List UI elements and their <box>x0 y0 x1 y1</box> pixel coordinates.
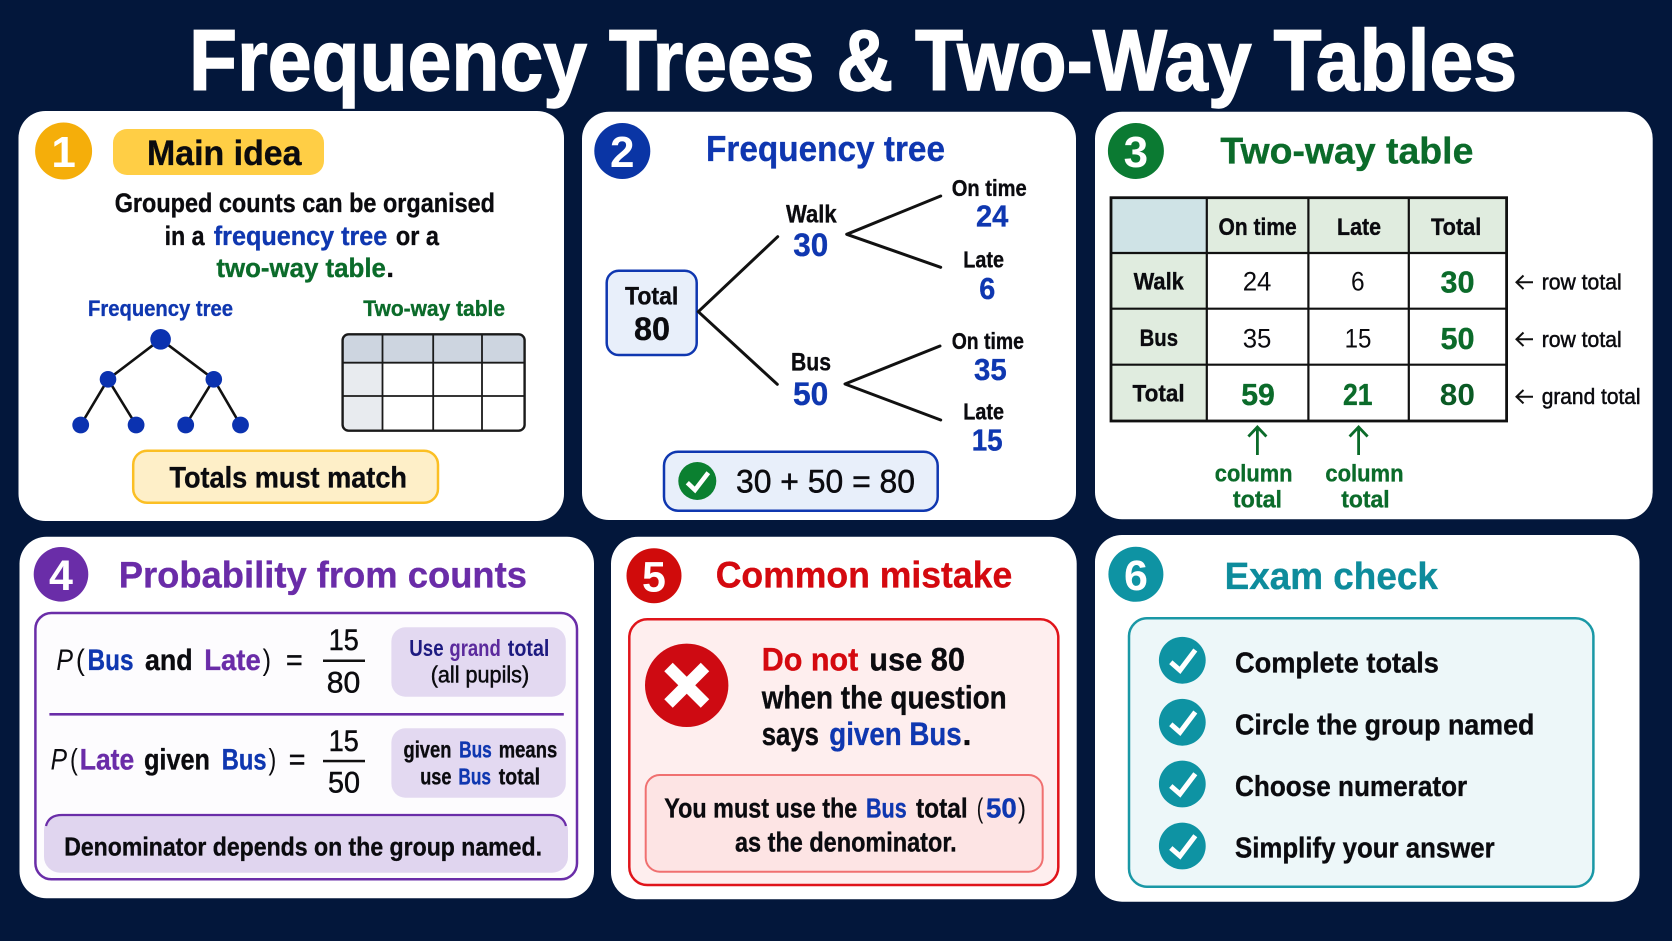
formula: P(Bus and Late) <box>56 624 365 700</box>
heading: two-way table: Two-way table <box>1220 130 1473 171</box>
warning text <box>761 642 1007 752</box>
badge 5 <box>626 548 682 603</box>
badge 4 <box>34 547 88 602</box>
check item: choose numerator <box>1159 761 1467 807</box>
node: bus 50: 50 <box>793 376 828 412</box>
arrow and note: column total 21: total <box>1341 486 1390 513</box>
inner box <box>35 613 577 879</box>
node: bus on time 35: On time <box>952 328 1024 354</box>
node: walk 30 <box>786 200 837 263</box>
formula: P(Bus and Late): and <box>145 644 193 677</box>
heading: exam check: Exam check <box>1225 556 1439 598</box>
note: row total: row total <box>1542 327 1622 352</box>
heading: main idea <box>113 129 324 175</box>
table: 24 <box>1243 267 1271 297</box>
correction box: ( <box>977 792 983 823</box>
heading: probability from counts: Probability from counts <box>119 554 527 595</box>
arrow and note: column total 21: column <box>1325 461 1404 488</box>
correction box <box>646 775 1043 872</box>
badge 3 <box>1108 123 1164 179</box>
formula: P(Bus and Late): 15 <box>329 624 359 657</box>
panel 3: two-way table <box>1095 112 1653 519</box>
note: given bus: total <box>499 763 540 789</box>
node: walk late 6: Late <box>963 247 1004 273</box>
correction box: ) <box>1018 792 1026 823</box>
icon: red cross <box>645 644 728 727</box>
correction box: Bus <box>866 792 907 823</box>
main idea text: two-way table <box>216 253 386 283</box>
note: given bus: use <box>420 763 451 789</box>
formula: P(Bus and Late): ( <box>76 644 85 677</box>
callout: denominator: Denominator depends on the group named. <box>64 832 542 862</box>
main idea text: . <box>386 253 394 283</box>
note: given bus: given <box>404 737 451 763</box>
panel 4: probability from counts <box>20 537 594 898</box>
callout: denominator <box>44 814 568 873</box>
note: grand total: grand total <box>1542 384 1641 409</box>
node: walk on time 24 <box>952 175 1027 234</box>
badge 1: 1 <box>51 128 76 177</box>
check item: simplify your answer <box>1159 823 1495 869</box>
formula: P(Late given Bus): = <box>289 743 305 776</box>
title: Frequency Trees & Two-Way Tables <box>189 13 1517 109</box>
table: 50 <box>1440 321 1474 356</box>
callout: totals must match <box>133 451 438 503</box>
main idea text <box>115 188 495 283</box>
badge 3: 3 <box>1124 128 1148 177</box>
node: bus 50 <box>791 349 831 412</box>
formula: P(Bus and Late): Late <box>204 644 261 677</box>
node: walk 30: 30 <box>793 227 828 263</box>
node: bus late 15: Late <box>963 398 1004 424</box>
heading: main idea: Main idea <box>147 134 302 173</box>
badge 1 <box>35 122 92 180</box>
formula: P(Bus and Late): Bus <box>88 644 134 677</box>
icon: green check <box>678 462 716 500</box>
heading: frequency tree: Frequency tree <box>706 128 945 169</box>
correction box: 50 <box>986 792 1017 823</box>
table: On time <box>1218 214 1297 241</box>
note: use grand total: grand <box>449 635 501 661</box>
badge 6 <box>1108 547 1163 602</box>
warning text: given Bus <box>829 716 962 752</box>
note: use grand total: total <box>508 635 549 661</box>
note: use grand total: (all pupils) <box>431 662 529 688</box>
node: walk on time 24: On time <box>952 175 1027 201</box>
note: use grand total: Use <box>409 635 444 661</box>
tree root: total 80: 80 <box>634 311 670 347</box>
check item: complete totals <box>1159 637 1439 684</box>
formula: P(Late given Bus): ) <box>268 743 276 776</box>
check item: complete totals: Complete totals <box>1235 647 1439 679</box>
panel 6: exam check <box>1095 535 1640 902</box>
main idea text: or a <box>396 221 439 251</box>
label: frequency tree: Frequency tree <box>88 296 233 321</box>
formula: P(Bus and Late): ) <box>263 644 271 677</box>
table: 21 <box>1343 377 1373 412</box>
table: Bus <box>1140 325 1178 352</box>
formula: P(Bus and Late): 80 <box>327 667 360 700</box>
note: use grand total <box>391 627 566 697</box>
correction box: You must use the <box>664 792 857 823</box>
tree branches <box>698 196 941 420</box>
formula: P(Late given Bus): 50 <box>328 767 360 800</box>
formula: P(Bus and Late): = <box>286 644 303 677</box>
arrow and note: column total 59: total <box>1233 486 1282 513</box>
table: 6 <box>1351 267 1365 297</box>
callout: totals must match: Totals must match <box>169 461 407 494</box>
mini tree diagram <box>72 329 249 433</box>
correction box: total <box>916 792 968 823</box>
note: given bus <box>391 728 566 798</box>
table: Late <box>1337 214 1381 241</box>
arrow and note: column total 59 <box>1215 427 1292 513</box>
table <box>1111 198 1507 421</box>
note: given bus: Bus <box>458 763 491 789</box>
formula: P(Late given Bus): P <box>51 743 67 776</box>
node: bus on time 35: 35 <box>974 352 1007 387</box>
heading: common mistake: Common mistake <box>716 555 1012 596</box>
panel 1: main idea <box>18 111 564 521</box>
panel 5: common mistake <box>611 537 1077 899</box>
check item: simplify your answer: Simplify your answer <box>1235 833 1495 865</box>
formula: P(Bus and Late): P <box>56 644 73 677</box>
arrow and note: column total 21 <box>1325 427 1404 513</box>
warning text: says <box>762 716 819 752</box>
label: two-way table: Two-way table <box>363 296 505 321</box>
table: Total <box>1431 214 1481 241</box>
badge 6: 6 <box>1124 552 1148 600</box>
mini two-way table <box>343 334 525 431</box>
table: 80 <box>1440 377 1475 412</box>
table: 15 <box>1345 323 1371 353</box>
node: bus late 15 <box>963 398 1004 458</box>
formula: P(Late given Bus): 15 <box>329 725 359 758</box>
main idea text: in a <box>165 221 205 251</box>
warning box <box>629 619 1058 885</box>
table: Walk <box>1134 268 1184 295</box>
formula: P(Late given Bus): ( <box>70 743 78 776</box>
check item: circle the group named <box>1159 699 1534 746</box>
table: 59 <box>1241 377 1275 412</box>
warning text: Do not <box>762 642 859 678</box>
note: given bus: means <box>499 737 557 763</box>
arrow and note: column total 59: column <box>1215 461 1292 488</box>
node: bus late 15: 15 <box>972 423 1003 458</box>
main idea text: Grouped counts can be organised <box>115 188 495 218</box>
note: given bus: Bus <box>459 737 492 763</box>
main idea text: frequency tree <box>214 221 387 251</box>
correction box: as the denominator. <box>735 827 957 858</box>
warning text: . <box>962 716 971 752</box>
table: 35 <box>1243 323 1271 353</box>
table: Total <box>1132 381 1185 408</box>
node: bus 50: Bus <box>791 349 831 377</box>
node: walk late 6: 6 <box>979 271 995 306</box>
tree root: total 80 <box>607 271 697 355</box>
formula: P(Late given Bus): Late <box>80 743 134 776</box>
formula: P(Late given Bus): given <box>144 743 210 776</box>
check item: choose numerator: Choose numerator <box>1235 771 1467 803</box>
formula: P(Late given Bus): Bus <box>222 743 266 776</box>
formula: P(Late given Bus) <box>51 725 365 800</box>
badge 5: 5 <box>642 554 666 602</box>
tree root: total 80: Total <box>625 282 678 310</box>
node: bus on time 35 <box>952 328 1024 387</box>
check item: circle the group named: Circle the group named <box>1235 709 1534 741</box>
callout: 30 + 50 = 80: 30 + 50 = 80 <box>736 464 915 500</box>
badge 4: 4 <box>49 552 73 600</box>
table: 30 <box>1440 265 1474 300</box>
checklist box <box>1129 618 1593 887</box>
callout: 30 + 50 = 80 <box>664 452 938 511</box>
node: walk on time 24: 24 <box>976 199 1009 234</box>
warning text: use 80 <box>869 642 965 678</box>
panel 2: frequency tree <box>582 112 1076 520</box>
node: walk late 6 <box>963 247 1004 306</box>
badge 2 <box>594 123 650 179</box>
badge 2: 2 <box>610 128 635 177</box>
warning text: when the question <box>761 679 1007 715</box>
note: row total: row total <box>1542 269 1622 294</box>
node: walk 30: Walk <box>786 200 837 228</box>
